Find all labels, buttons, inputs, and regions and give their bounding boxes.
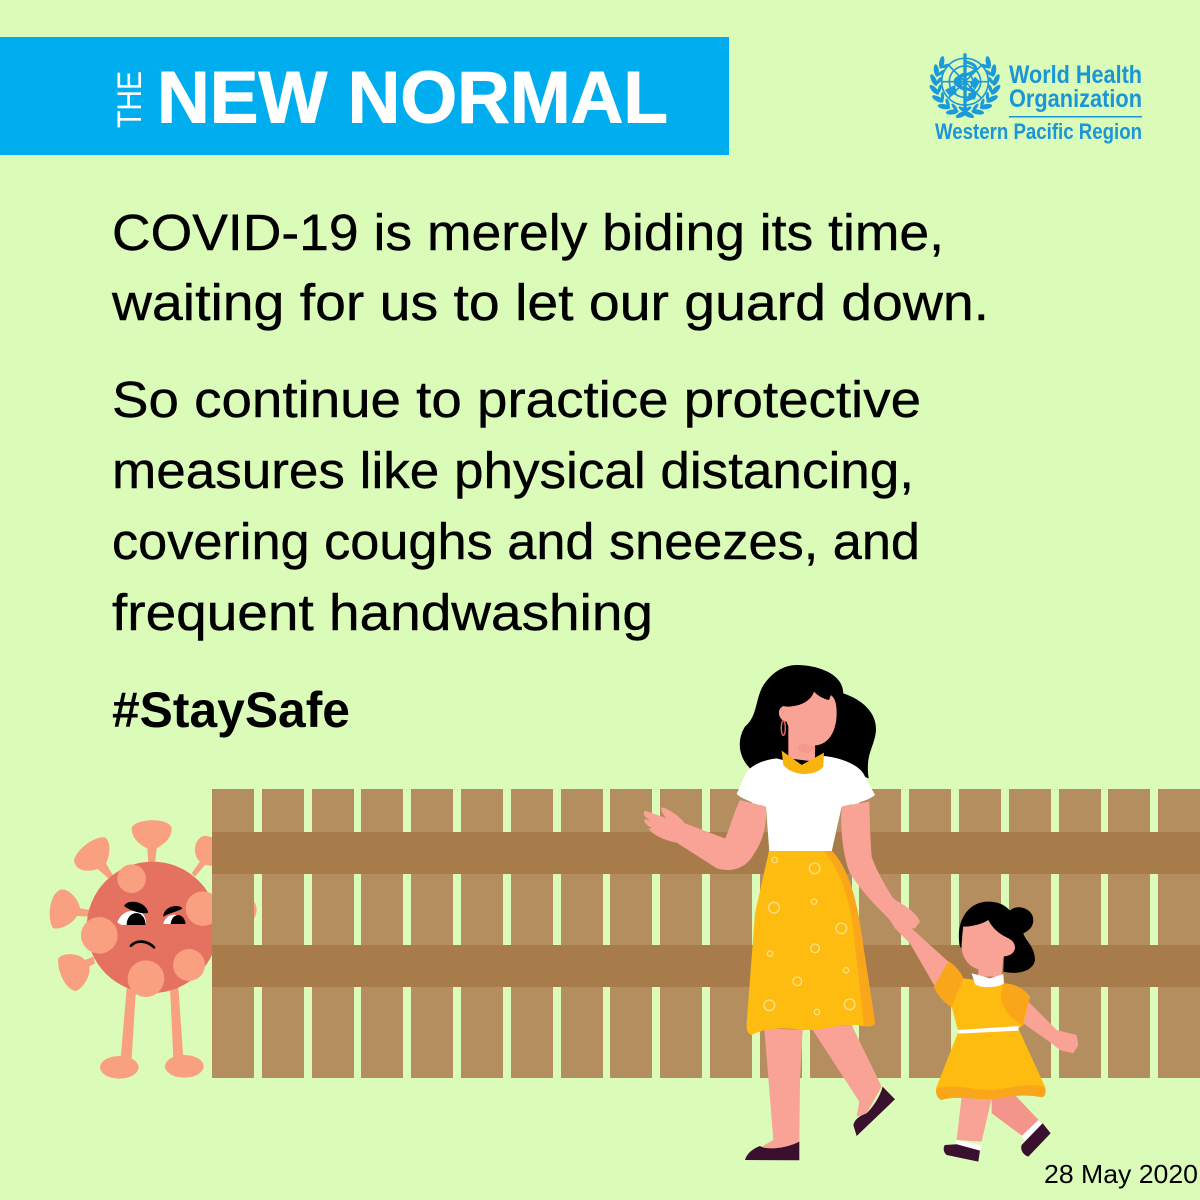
text block: protective measures: So continue to practice protective <box>112 371 921 428</box>
virus character <box>50 820 257 1079</box>
woman upper body <box>644 665 917 930</box>
woman lower body <box>745 851 895 1160</box>
girl figure <box>887 902 1078 1162</box>
heading: NEW NORMAL: NEW NORMAL <box>157 58 668 138</box>
date stamp: 28 May 2020 <box>1044 1159 1198 1189</box>
text block: protective measures: frequent handwashing <box>112 584 653 641</box>
text block: protective measures: measures like physical distancing, <box>112 442 914 499</box>
text block: protective measures: covering coughs and sneezes, and <box>112 513 920 570</box>
text block: protective measures <box>112 371 921 641</box>
logo text: Western Pacific Region: Western Pacific Region <box>935 119 1142 144</box>
text block: intro: COVID-19 is merely biding its time, <box>112 204 944 261</box>
logo text: World Health: World Health <box>1009 61 1142 89</box>
WHO logo <box>928 53 1142 144</box>
header banner <box>0 37 729 155</box>
logo text: Organization: Organization <box>1009 85 1142 113</box>
text block: intro <box>111 204 989 331</box>
woman figure <box>644 665 917 1160</box>
text block: intro: waiting for us to let our guard down. <box>111 274 989 331</box>
icon: WHO emblem <box>928 53 1002 121</box>
heading prefix: THE: THE <box>111 71 149 128</box>
wooden fence <box>212 789 1200 1078</box>
hashtag: #StaySafe <box>112 682 350 738</box>
